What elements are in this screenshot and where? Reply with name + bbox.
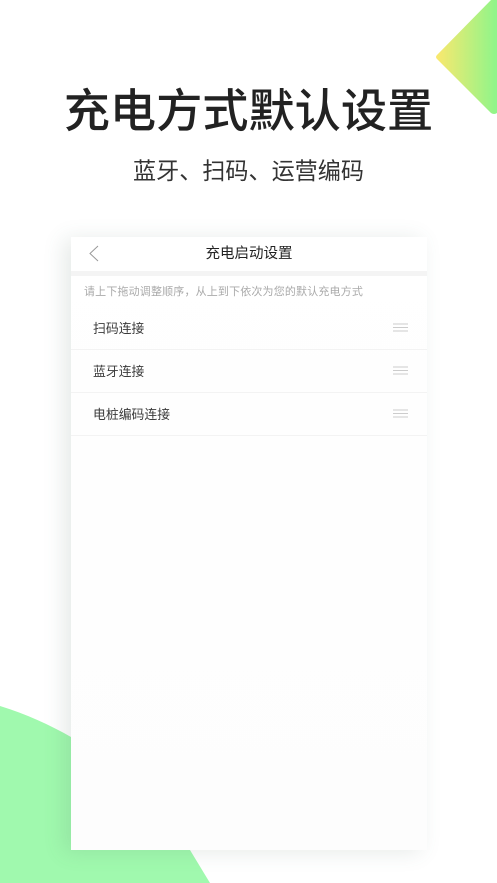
list row: pile code: 电桩编码连接 [93, 407, 170, 422]
list row: bluetooth: 蓝牙连接 [93, 364, 144, 379]
decorative gradient diamond top-right [436, 0, 497, 114]
hint text: 请上下拖动调整顺序，从上到下依次为您的默认充电方式 [84, 286, 363, 298]
subtitle: 蓝牙、扫码、运营编码 [133, 158, 364, 184]
list row: scan code: 扫码连接 [93, 321, 144, 336]
divider band [71, 271, 427, 276]
panel: phone screen [71, 237, 427, 850]
list row: pile code [71, 393, 427, 436]
icon: back arrow [89, 246, 98, 262]
decorative green blob bottom-left [0, 706, 210, 883]
header bar [89, 245, 292, 262]
title: 充电方式默认设置 [64, 85, 433, 137]
list row: scan code [71, 307, 427, 350]
screen heading: 充电启动设置 [206, 246, 292, 262]
list row: bluetooth [71, 350, 427, 393]
